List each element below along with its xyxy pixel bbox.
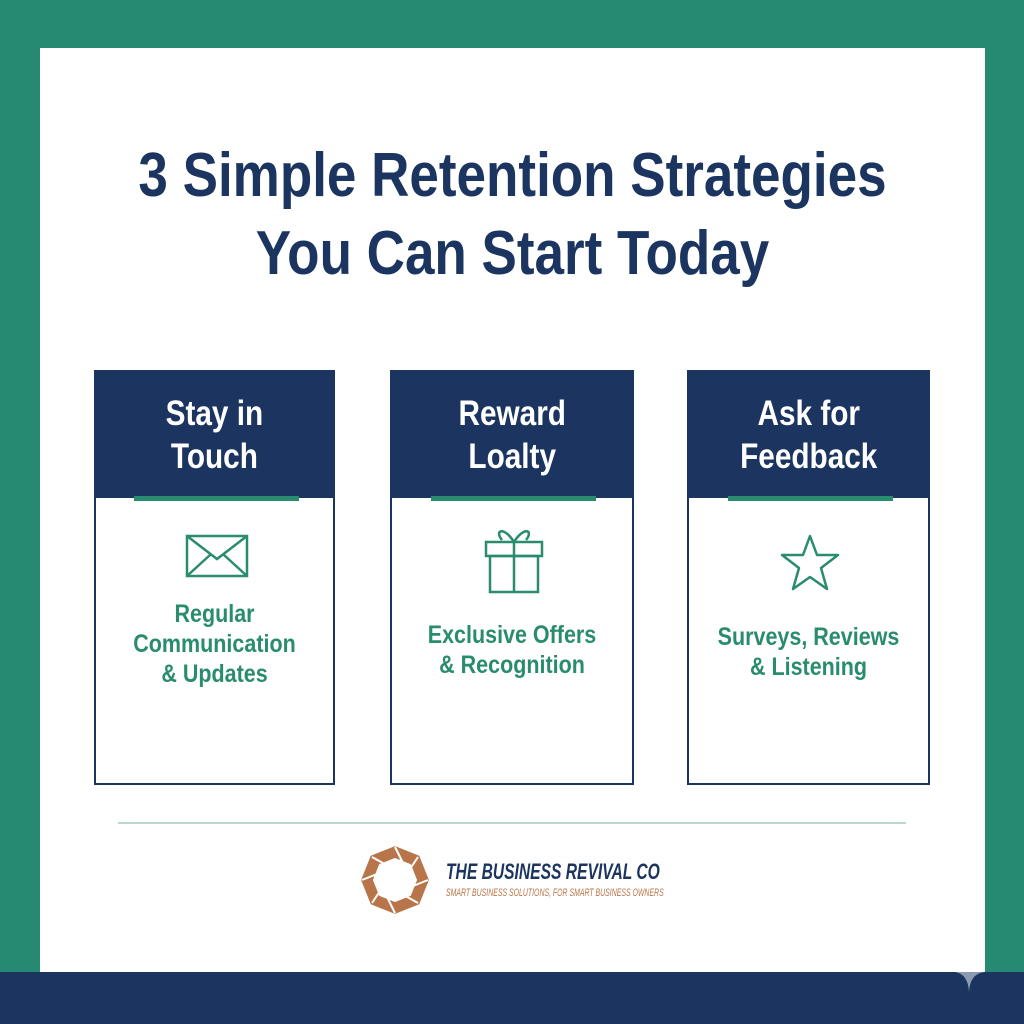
text: Exclusive Offers bbox=[428, 621, 596, 649]
heading: Stay in bbox=[166, 394, 263, 433]
panel: ask for feedback bbox=[687, 370, 930, 785]
icon: logo mark bbox=[361, 846, 429, 914]
title: You Can Start Today bbox=[256, 219, 769, 288]
corner sparkle bbox=[955, 972, 984, 992]
text: & Updates bbox=[161, 660, 268, 688]
text: & Recognition bbox=[439, 651, 585, 679]
heading bbox=[96, 372, 333, 498]
text: Regular bbox=[174, 600, 255, 628]
title bbox=[138, 141, 887, 288]
panel: reward loyalty bbox=[390, 370, 634, 785]
logo bbox=[361, 846, 664, 914]
tagline: SMART BUSINESS SOLUTIONS, FOR SMART BUSINESS OWNERS bbox=[446, 887, 664, 899]
divider bbox=[118, 822, 906, 824]
title: 3 Simple Retention Strategies bbox=[138, 141, 887, 210]
text: & Listening bbox=[750, 653, 867, 681]
heading: Touch bbox=[171, 437, 258, 476]
icon: star bbox=[780, 534, 840, 590]
heading: Reward bbox=[458, 394, 566, 433]
navy footer band bbox=[0, 972, 1024, 1024]
panel: stay in touch bbox=[94, 370, 335, 785]
heading: Ask for bbox=[757, 394, 860, 433]
heading bbox=[392, 372, 632, 498]
heading: Feedback bbox=[740, 437, 877, 476]
text: Surveys, Reviews bbox=[718, 623, 899, 651]
text bbox=[718, 623, 899, 681]
icon: envelope bbox=[186, 534, 248, 578]
text bbox=[428, 621, 596, 679]
heading: Loalty bbox=[468, 437, 556, 476]
icon: gift bbox=[484, 530, 544, 594]
text: Communication bbox=[133, 630, 296, 658]
heading bbox=[689, 372, 928, 498]
text bbox=[133, 600, 296, 688]
brand name: THE BUSINESS REVIVAL CO bbox=[446, 859, 660, 884]
